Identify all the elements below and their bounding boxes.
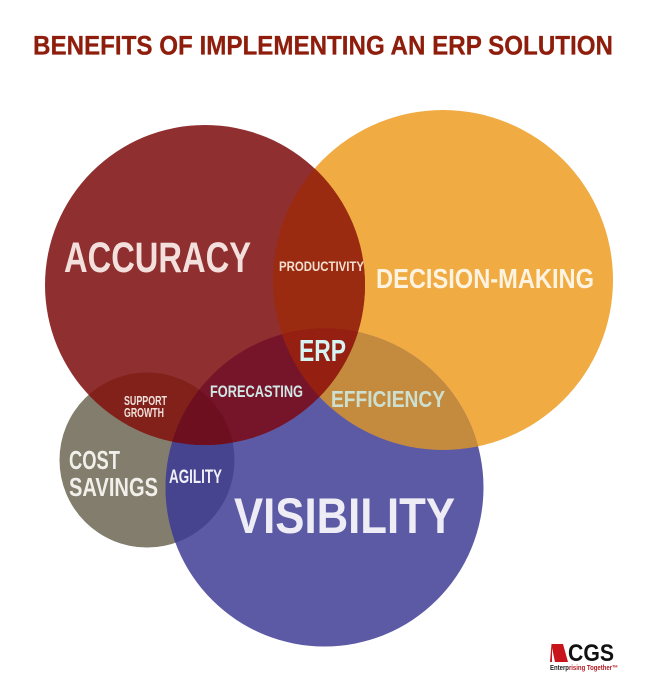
- label: agility: AGILITY: [169, 467, 222, 488]
- circle: decision-making: [273, 110, 613, 450]
- logo wordmark: CGS: [568, 640, 614, 667]
- overlap: accuracy, decision and visibility: [282, 328, 358, 396]
- label: accuracy: ACCURACY: [64, 234, 251, 282]
- label: cost savings: SAVINGS: [69, 472, 158, 502]
- label: decision-making: DECISION-MAKING: [376, 263, 594, 294]
- label: forecasting: FORECASTING: [210, 382, 303, 401]
- venn diagram: [45, 110, 613, 646]
- overlap: accuracy and decision: [273, 168, 365, 394]
- circle: visibility: [166, 328, 484, 646]
- circle: accuracy: [45, 125, 365, 445]
- overlap: accuracy and cost: [88, 372, 232, 445]
- overlap: cost and visibility: [166, 442, 234, 542]
- label: erp: ERP: [299, 333, 346, 368]
- label: cost savings: COST: [69, 445, 120, 475]
- overlap: decision and visibility: [320, 332, 478, 450]
- label: support growth: GROWTH: [124, 406, 164, 420]
- label: productivity: PRODUCTIVITY: [279, 259, 364, 274]
- logo tagline: Enterprising Together™: [550, 665, 618, 672]
- label: cost savings: [69, 445, 158, 502]
- overlap: accuracy and visibility: [172, 328, 358, 445]
- title: BENEFITS OF IMPLEMENTING AN ERP SOLUTION: [33, 30, 613, 60]
- logo mark: [550, 644, 568, 662]
- logo: CGS: [550, 640, 618, 672]
- label: support growth: SUPPORT: [124, 394, 167, 408]
- label: efficiency: EFFICIENCY: [331, 386, 445, 412]
- label: visibility: VISIBILITY: [234, 488, 455, 544]
- overlap: accuracy, cost and visibility: [172, 390, 232, 445]
- circle: cost savings: [60, 372, 234, 548]
- label: support growth: [124, 394, 167, 420]
